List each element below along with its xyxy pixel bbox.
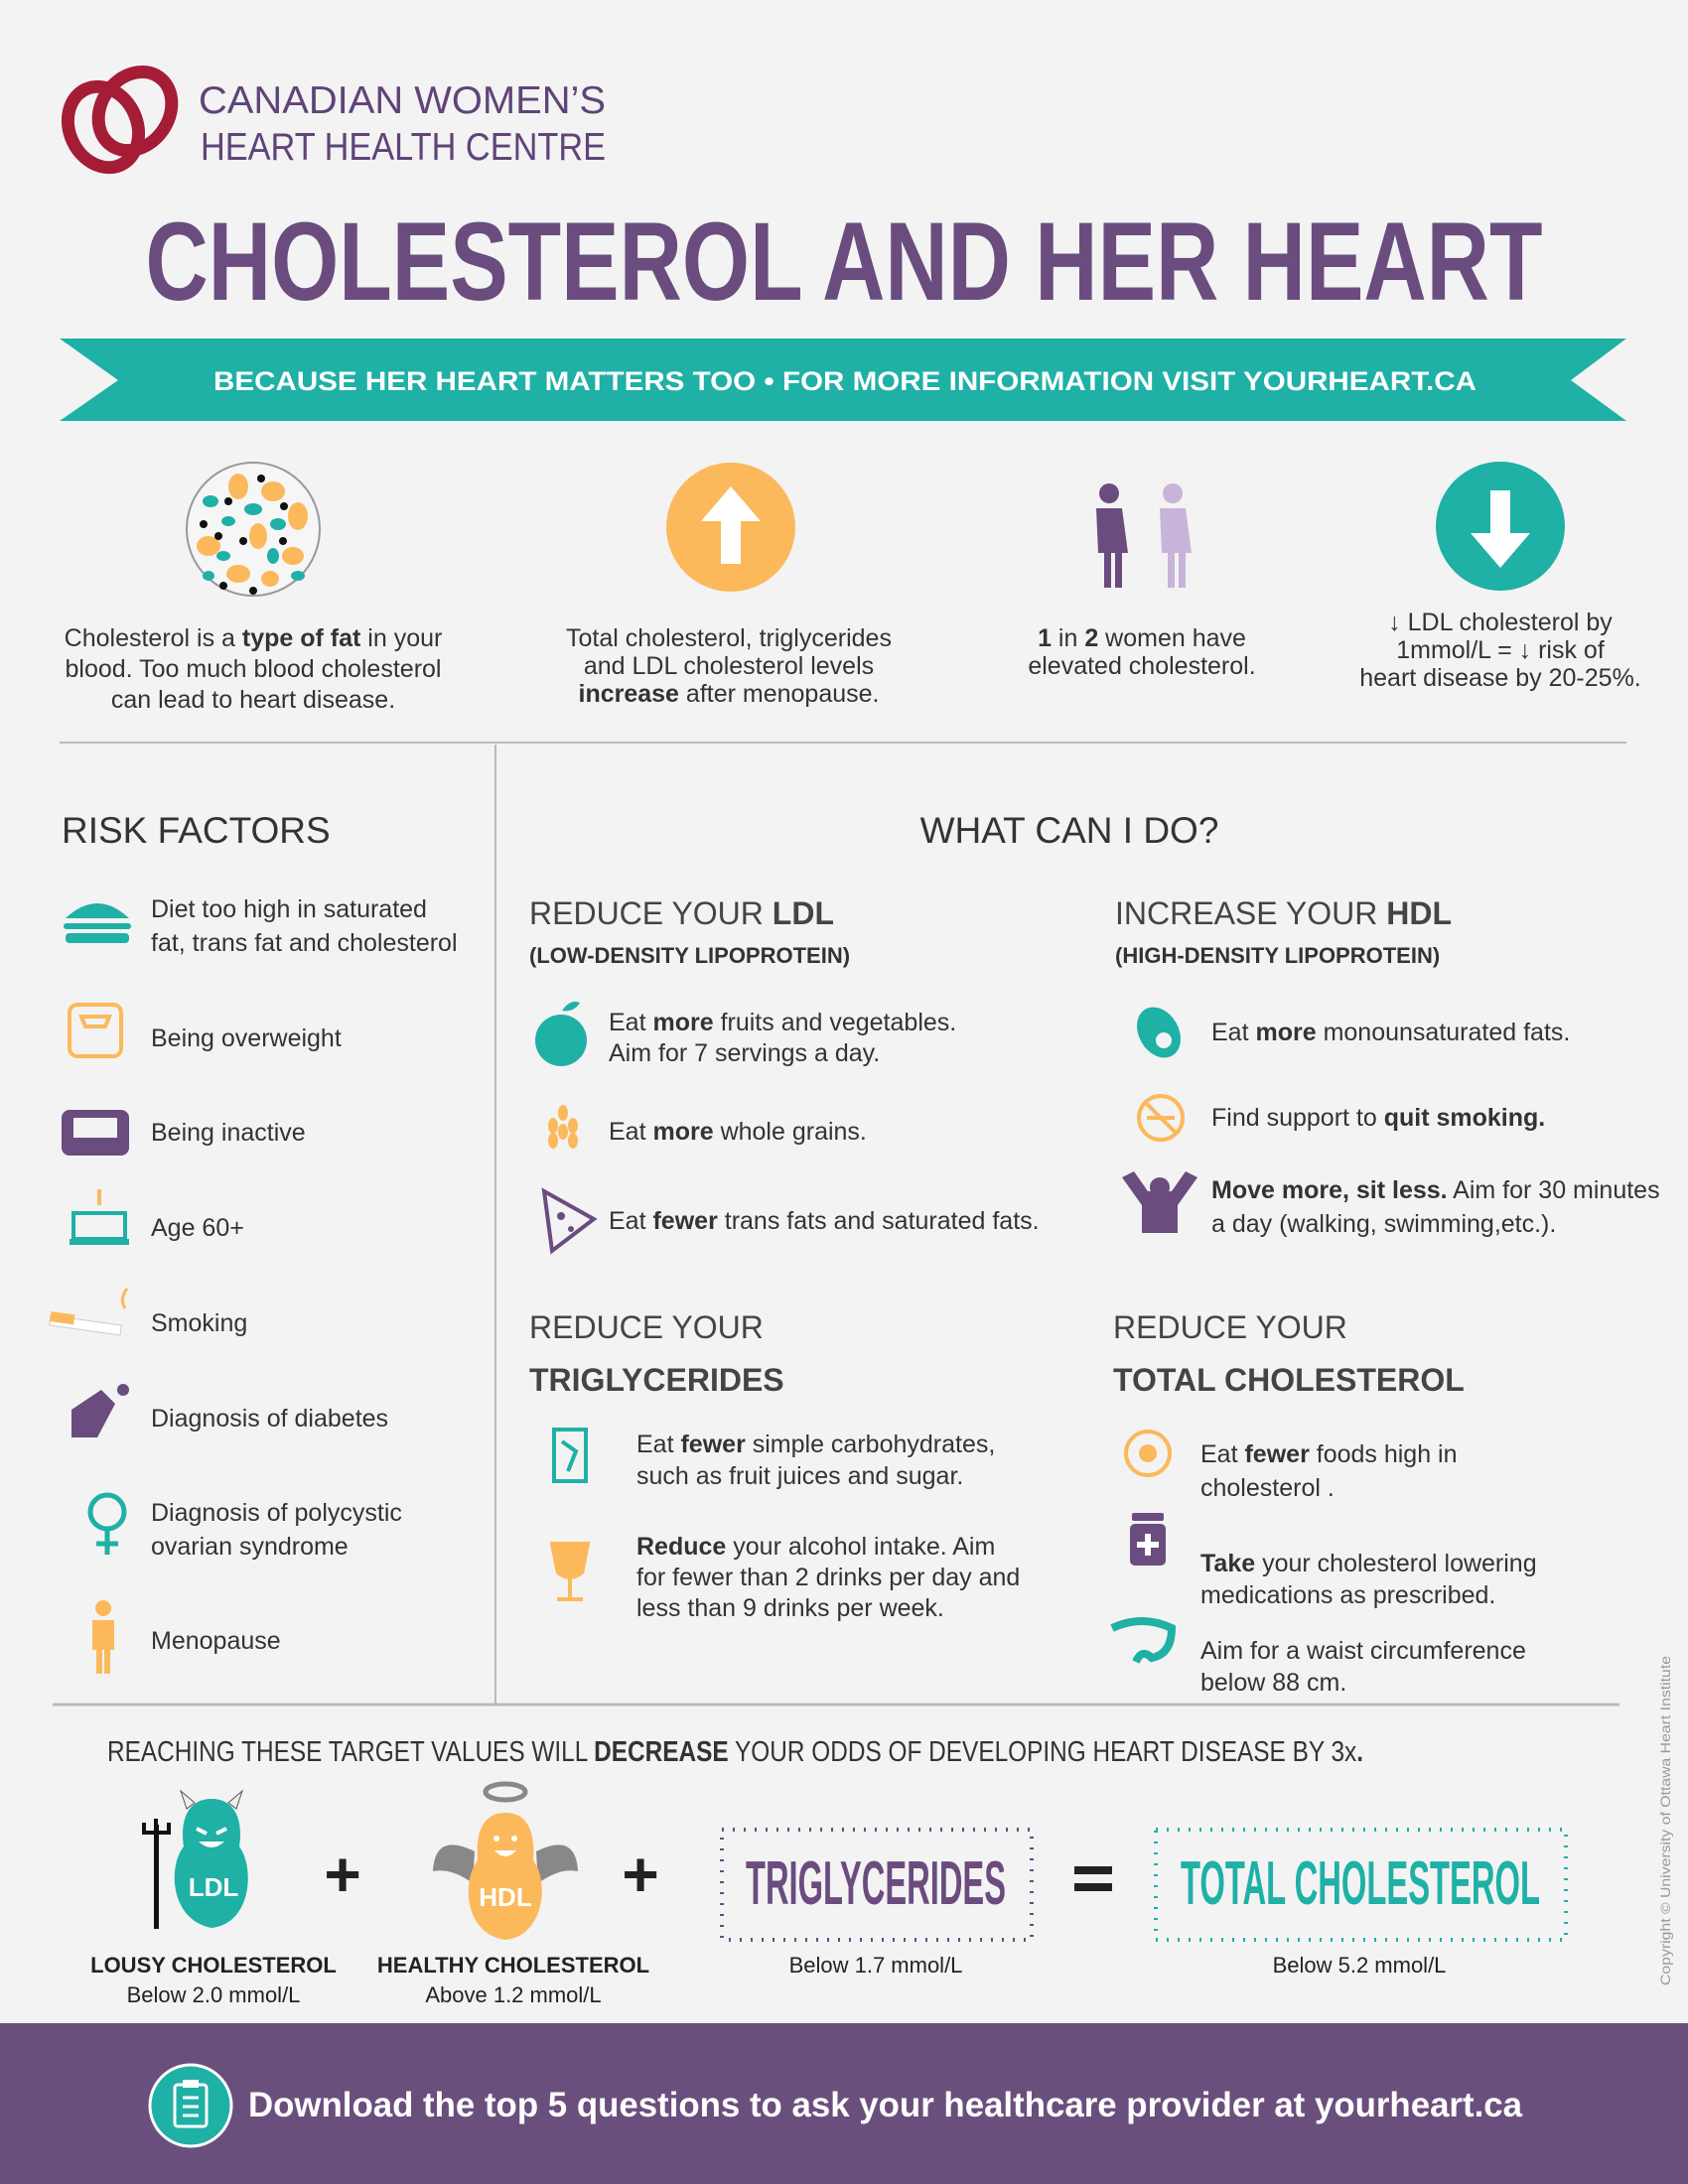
section: reduce total cholesterol: medications as prescribed. [1200, 1581, 1495, 1609]
text: 1 in 2 women have [1038, 624, 1246, 652]
panel: what can I do [529, 810, 1660, 1697]
text: diabetes: Diagnosis of diabetes [151, 1405, 388, 1433]
section: reduce LDL: (LOW-DENSITY LIPOPROTEIN) [529, 943, 850, 968]
section: reduce total cholesterol: below 88 cm. [1200, 1669, 1346, 1697]
section: reduce triglycerides: REDUCE YOUR [529, 1309, 764, 1345]
section: increase HDL: a day (walking, swimming,etc.). [1211, 1210, 1556, 1238]
section: reduce LDL: REDUCE YOUR LDL [529, 895, 834, 931]
LDL character [144, 1791, 248, 1929]
target labels: LOUSY CHOLESTEROL [90, 1953, 337, 1978]
icon: woman [92, 1600, 114, 1674]
fact: type of fat [65, 463, 442, 714]
section: reduce total cholesterol: Eat fewer foods high in [1200, 1440, 1458, 1468]
logo: HEART HEALTH CENTRE [201, 126, 606, 169]
section: reduce LDL: Eat fewer trans fats and saturated fats. [609, 1207, 1040, 1235]
fact: increase after menopause [566, 463, 892, 708]
text: diet: fat, trans fat and cholesterol [151, 929, 458, 957]
LDL character: LDL [189, 1872, 238, 1902]
footer text: Download the top 5 questions to ask your healthcare provider at yourheart.ca [248, 2086, 1523, 2124]
icon: cigarette [50, 1289, 127, 1335]
text: blood. Too much blood cholesterol [66, 655, 441, 683]
section: increase HDL: (HIGH-DENSITY LIPOPROTEIN) [1115, 943, 1440, 968]
icon: pizza [544, 1191, 594, 1251]
section: increase HDL: Eat more monounsaturated fats. [1211, 1019, 1570, 1046]
section: reduce total cholesterol: Take your cholesterol lowering [1200, 1550, 1537, 1577]
section: reduce total cholesterol: TOTAL CHOLESTEROL [1113, 1362, 1465, 1398]
banner [60, 339, 1626, 421]
icon: up arrow [666, 463, 795, 592]
text: heart disease by 20-25%. [1359, 664, 1641, 692]
logo icon [55, 58, 187, 179]
section: reduce triglycerides [529, 1309, 1020, 1622]
text: can lead to heart disease. [111, 686, 395, 714]
icon: measuring tape [1112, 1621, 1172, 1662]
text: overweight: Being overweight [151, 1024, 342, 1052]
text: smoking: Smoking [151, 1309, 247, 1337]
icon: finger prick [71, 1384, 129, 1437]
icon: female symbol [90, 1495, 124, 1555]
icon: apple [535, 1002, 587, 1066]
text: Cholesterol is a type of fat in your [65, 624, 442, 652]
section: increase HDL: Move more, sit less. Aim for 30 minutes [1211, 1176, 1660, 1204]
text: PCOS: ovarian syndrome [151, 1533, 349, 1561]
heading: WHAT CAN I DO? [920, 810, 1218, 851]
section: reduce total cholesterol: Aim for a waist circumference [1200, 1637, 1526, 1665]
text: PCOS: Diagnosis of polycystic [151, 1499, 402, 1527]
icon: no smoking [1139, 1096, 1183, 1140]
icon: avocado [1128, 1000, 1190, 1065]
copyright: Copyright © University of Ottawa Heart Institute [1657, 1656, 1673, 1985]
section: increase HDL: INCREASE YOUR HDL [1115, 895, 1452, 931]
icon: wine glass [550, 1544, 590, 1601]
icon: clipboard [150, 2065, 231, 2146]
section: reduce triglycerides: such as fruit juices and sugar. [636, 1462, 963, 1490]
target labels [90, 1953, 1446, 2007]
icon: down arrow [1436, 462, 1565, 591]
plus: + [622, 1839, 659, 1910]
target labels: Below 5.2 mmol/L [1273, 1953, 1446, 1978]
section: reduce LDL [529, 895, 1040, 1251]
section: reduce triglycerides: TRIGLYCERIDES [529, 1362, 784, 1398]
fact: LDL reduction [1359, 462, 1641, 692]
icon: juice glass [554, 1430, 586, 1481]
icon: armchair [62, 1110, 129, 1156]
section: reduce triglycerides: for fewer than 2 drinks per day and [636, 1564, 1020, 1591]
text: inactive: Being inactive [151, 1119, 306, 1147]
icon: blood cells [187, 463, 320, 596]
HDL character: HDL [479, 1882, 532, 1912]
target labels: Below 2.0 mmol/L [127, 1982, 300, 2007]
panel: risk factors [50, 810, 458, 1674]
target labels: Above 1.2 mmol/L [425, 1982, 602, 2007]
icon: pill bottle [1130, 1513, 1166, 1566]
section: reduce total cholesterol [1112, 1309, 1537, 1697]
text: increase after menopause. [579, 680, 879, 708]
equals [1074, 1866, 1112, 1891]
triglycerides box [722, 1830, 1032, 1940]
HDL character [433, 1784, 578, 1940]
target labels: HEALTHY CHOLESTEROL [377, 1953, 649, 1978]
plus: + [324, 1839, 361, 1910]
target labels: Below 1.7 mmol/L [789, 1953, 962, 1978]
text: diet: Diet too high in saturated [151, 895, 427, 923]
icon: scale [70, 1005, 121, 1056]
text: 1mmol/L = ↓ risk of [1396, 636, 1605, 664]
section: increase HDL: Find support to quit smoking. [1211, 1104, 1545, 1132]
section: reduce LDL: Eat more whole grains. [609, 1118, 867, 1146]
section: reduce total cholesterol: REDUCE YOUR [1113, 1309, 1347, 1345]
logo [55, 58, 606, 179]
text: age: Age 60+ [151, 1214, 244, 1242]
icon: egg [1126, 1432, 1170, 1475]
banner: BECAUSE HER HEART MATTERS TOO • FOR MORE INFORMATION VISIT YOURHEART.CA [213, 366, 1477, 396]
text: menopause: Menopause [151, 1627, 281, 1655]
section: reduce triglycerides: Reduce your alcohol intake. Aim [636, 1533, 995, 1561]
text: ↓ LDL cholesterol by [1388, 609, 1613, 636]
section: reduce total cholesterol: cholesterol . [1200, 1474, 1335, 1502]
section: reduce LDL: Aim for 7 servings a day. [609, 1039, 880, 1067]
section: reduce triglycerides: less than 9 drinks per week. [636, 1594, 944, 1622]
text: Total cholesterol, triglycerides [566, 624, 892, 652]
text: and LDL cholesterol levels [584, 652, 874, 680]
footer [0, 2023, 1688, 2184]
section: reduce LDL: Eat more fruits and vegetables. [609, 1009, 956, 1036]
icon: cake [70, 1189, 129, 1245]
fact: 1 in 2 women [1028, 483, 1256, 680]
text: elevated cholesterol. [1028, 652, 1256, 680]
icon: burger [64, 903, 131, 943]
icon: active person [1122, 1171, 1197, 1233]
icon: wheat [548, 1105, 578, 1149]
heading: RISK FACTORS [62, 810, 331, 851]
section: reduce triglycerides: Eat fewer simple carbohydrates, [636, 1431, 995, 1458]
section: increase HDL [1115, 895, 1660, 1238]
target values heading: REACHING THESE TARGET VALUES WILL DECREASE YOUR ODDS OF DEVELOPING HEART DISEASE BY 3x. [107, 1736, 1363, 1768]
icon: two women [1096, 483, 1192, 588]
triglycerides box: TRIGLYCERIDES [746, 1849, 1006, 1918]
logo text: CANADIAN WOMEN’S [199, 79, 606, 122]
total cholesterol box [1156, 1830, 1566, 1940]
